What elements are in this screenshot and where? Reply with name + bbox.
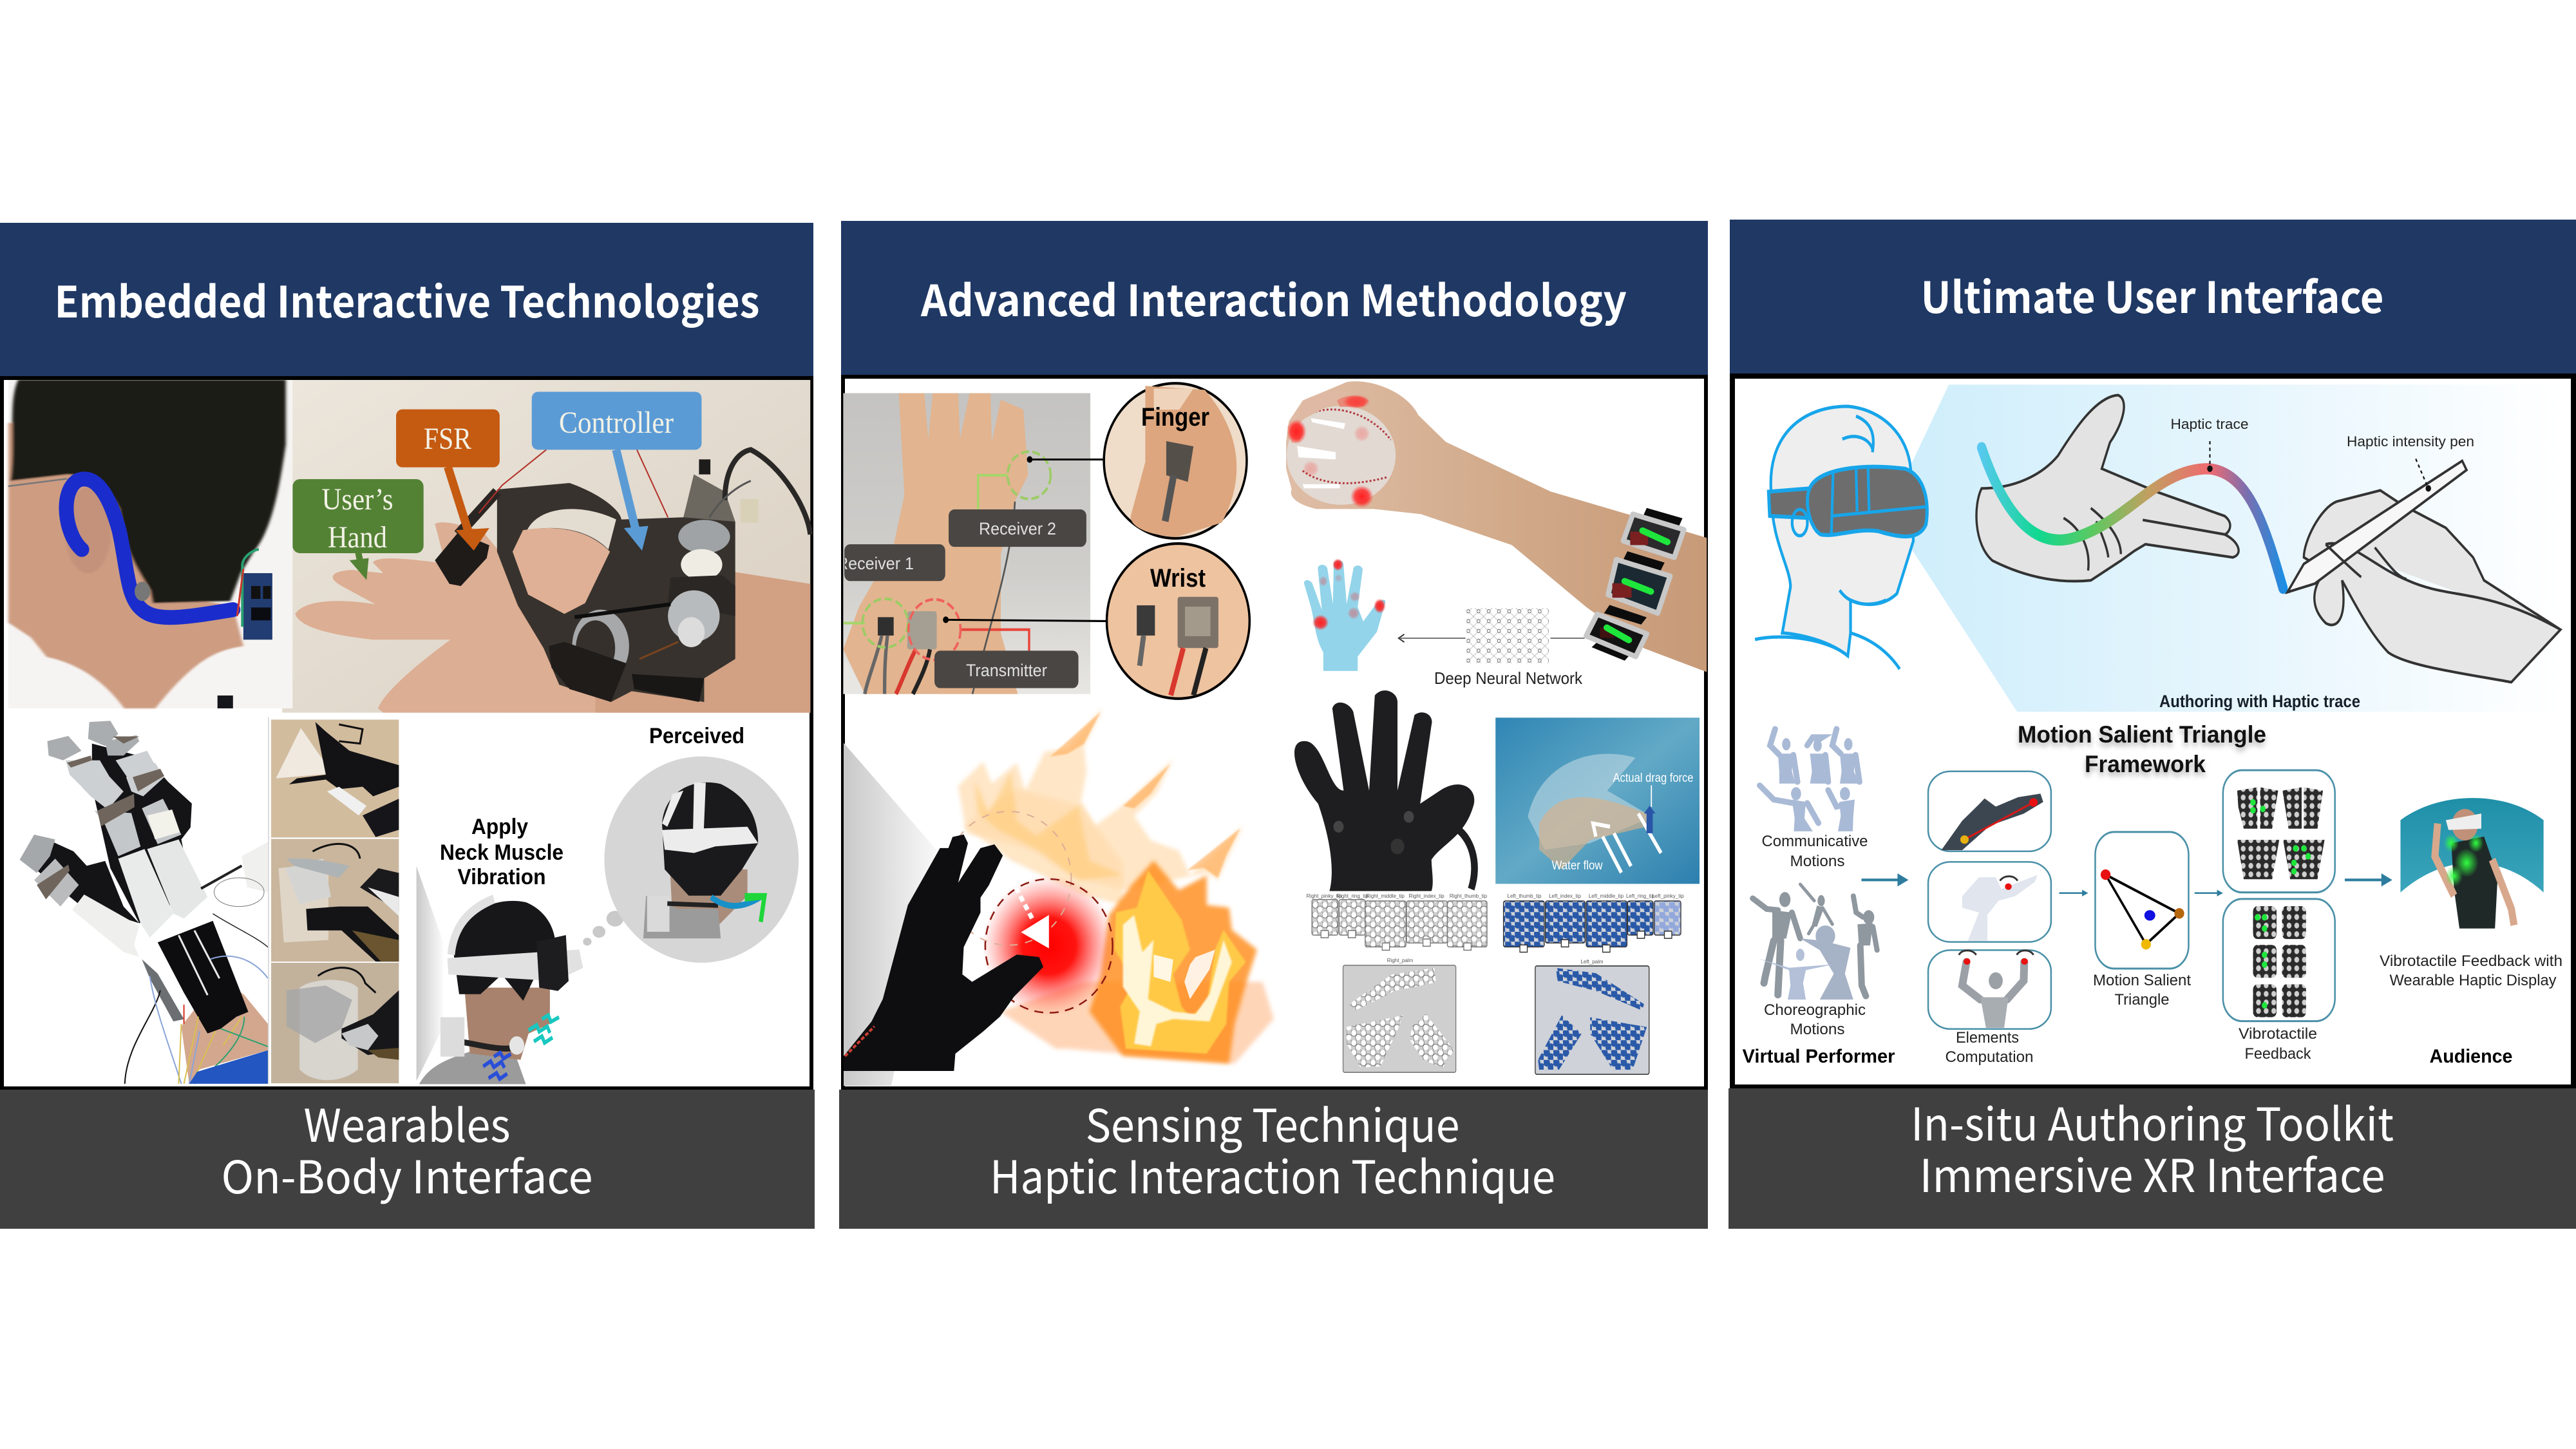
heading bar: Advanced Interaction Methodology: Advanced Interaction Methodology (920, 267, 1627, 329)
label: FSR: FSR (424, 422, 471, 456)
icon: gesturing hand (1976, 395, 2239, 581)
chart: left hand sensor dot maps: Left_palm (1580, 959, 1604, 965)
heading bar: Embedded Interactive Technologies (0, 223, 813, 378)
chart: right hand sensor dot maps: Right_middle_tip (1366, 893, 1405, 899)
caption bar: Sensing Technique, Haptic Interaction Technique: Haptic Interaction Technique (990, 1142, 1555, 1207)
chart: left hand sensor dot maps: Left_pinky_tip (1652, 893, 1684, 899)
figures: communicative motions (1760, 729, 1868, 870)
diagram: motion salient triangle (2093, 832, 2191, 1009)
panel: Advanced Interaction Methodology (837, 221, 1708, 1229)
label: Water flow: Water flow (1552, 859, 1603, 873)
heading bar: Ultimate User Interface: Ultimate User Interface (1920, 263, 2384, 326)
figures: choreographic motions (1753, 884, 1877, 1038)
label: Haptic trace: Haptic trace (2170, 416, 2249, 432)
label: Communicative Motions: Motions (1790, 853, 1844, 870)
panel: Ultimate User Interface (1728, 220, 2576, 1229)
caption bar: In-situ Authoring Toolkit, Immersive XR Interface: Immersive XR Interface (1919, 1141, 2385, 1206)
arrow: controller (616, 450, 649, 551)
label: Transmitter: Transmitter (966, 661, 1047, 680)
photo: wrist and finger sensors with labels (837, 393, 1106, 694)
photo: hand gripping baseball with haptic wristband (1286, 381, 1707, 672)
illustration: audience wearing haptic display (2380, 798, 2562, 1067)
arrow: performer to elements (1861, 873, 1908, 887)
arrow: user's hand (350, 553, 368, 580)
illustration: gloved hand reaching into flame (844, 707, 1274, 1086)
label: Vibrotactile Feedback: Vibrotactile (2239, 1025, 2317, 1043)
label: Receiver 2: Receiver 2 (979, 519, 1056, 538)
label: Virtual Performer: Virtual Performer (1743, 1046, 1895, 1067)
panel: Embedded Interactive Technologies (0, 223, 815, 1229)
label: Elements Computation: Elements (1956, 1029, 2019, 1046)
image: hand in water with drag force (1495, 717, 1700, 884)
label: Apply Neck Muscle Vibration: Apply (471, 815, 528, 839)
inset circle: wrist sensors (1107, 544, 1249, 699)
label: Wrist: Wrist (1150, 564, 1206, 592)
label: Vibrotactile Feedback (2239, 1025, 2317, 1063)
label: Authoring with Haptic trace: Authoring with Haptic trace (2159, 692, 2360, 711)
label: Choreographic Motions: Choreographic (1764, 1001, 1866, 1019)
label: Communicative Motions: Communicative (1762, 833, 1868, 850)
chart line: haptic trace (1982, 448, 2283, 588)
label: Apply Neck Muscle Vibration: Vibration (457, 865, 546, 889)
icon: hand holding haptic pen (2287, 459, 2561, 682)
caption bar: Wearables, On-Body Interface: Wearables (304, 1090, 510, 1155)
photo: blue behind-the-ear device on head (8, 380, 292, 708)
label: Vibrotactile Feedback with Wearable Haptic Display: Wearable Haptic Display (2389, 972, 2557, 989)
label: Deep Neural Network: Deep Neural Network (1434, 668, 1583, 688)
chart: right hand sensor dot maps: Right_ring_tip (1336, 893, 1368, 899)
label: User's Hand: Hand (328, 520, 387, 554)
label: Communicative Motions (1762, 833, 1868, 870)
label: Perceived: Perceived (649, 724, 744, 748)
label: Vibrotactile Feedback with Wearable Haptic Display (2380, 952, 2562, 989)
photo strip: glove grasping three objects (271, 719, 399, 1083)
flow box: elements computation (1928, 772, 2051, 1066)
label: Haptic intensity pen: Haptic intensity pen (2347, 433, 2474, 450)
chart: right hand sensor dot maps: Right_pinky_tip (1307, 893, 1342, 899)
chart: right hand sensor dot maps: Right_thumb_tip (1450, 893, 1488, 899)
label: Motion Salient Triangle: Motion Salient (2093, 972, 2191, 989)
heading: Motion Salient Triangle Framework: Framework (2085, 751, 2206, 777)
label: Motion Salient Triangle (2093, 972, 2191, 1009)
photo: hand with force feedback device and labels (282, 380, 810, 713)
illustration: authoring with haptic trace (1755, 384, 2561, 712)
icon: VR user head outline (1755, 406, 1927, 669)
inset circle: finger sensor (1104, 383, 1247, 538)
heading: Motion Salient Triangle Framework (2018, 721, 2266, 777)
label: Elements Computation: Computation (1945, 1048, 2034, 1066)
label: Elements Computation (1945, 1029, 2034, 1066)
arrow: elements to triangle (2059, 890, 2088, 896)
label: Actual drag force: Actual drag force (1613, 772, 1694, 785)
photo: black haptic glove (1294, 690, 1475, 891)
label: Choreographic Motions (1764, 1001, 1866, 1038)
caption bar: Wearables, On-Body Interface: On-Body Interface (222, 1142, 592, 1207)
label: Vibrotactile Feedback with Wearable Haptic Display: Vibrotactile Feedback with (2380, 952, 2562, 970)
chart: right hand sensor dot maps (1307, 893, 1488, 1072)
caption bar: Sensing Technique, Haptic Interaction Technique: Sensing Technique (1086, 1090, 1459, 1155)
label: Vibrotactile Feedback: Feedback (2245, 1045, 2311, 1063)
label: Motion Salient Triangle: Triangle (2115, 991, 2169, 1009)
caption bar: Wearables, On-Body Interface (0, 1090, 815, 1229)
chart: right hand sensor dot maps: Right_index_tip (1408, 893, 1444, 899)
label: Finger: Finger (1141, 403, 1209, 431)
illustration: light blue hand with pressure points (1304, 558, 1386, 671)
chart: left hand sensor dot maps: Left_thumb_tip (1508, 893, 1542, 899)
label: Audience: Audience (2429, 1046, 2513, 1067)
chart: left hand sensor dot maps: Left_index_tip (1549, 893, 1581, 899)
label: User's Hand: User’s (322, 482, 393, 516)
chart: right hand sensor dot maps: Right_palm (1387, 958, 1414, 963)
label: Receiver 1: Receiver 1 (837, 554, 914, 573)
label: User's Hand (322, 482, 393, 554)
label: Choreographic Motions: Motions (1790, 1021, 1844, 1038)
heading bar: Ultimate User Interface (1730, 220, 2576, 375)
diagram: vibrotactile feedback vests (2223, 770, 2335, 1063)
heading bar: Advanced Interaction Methodology (841, 221, 1708, 377)
chart: left hand sensor dot maps: Left_middle_tip (1589, 893, 1624, 899)
heading bar: Embedded Interactive Technologies: Embedded Interactive Technologies (54, 268, 760, 330)
arrow: feedback to audience (2345, 873, 2392, 887)
label: Controller: Controller (559, 406, 674, 440)
illustration: neck muscle vibration with headset (417, 724, 799, 1084)
label: Apply Neck Muscle Vibration: Neck Muscle (440, 840, 564, 865)
caption bar: Sensing Technique, Haptic Interaction Technique (839, 1090, 1708, 1229)
diagram: deep neural network (1399, 608, 1584, 688)
arrow: FSR (448, 467, 489, 551)
photo: robotic hand exoskeleton glove (20, 717, 269, 1084)
caption bar: In-situ Authoring Toolkit, Immersive XR Interface: In-situ Authoring Toolkit (1911, 1089, 2394, 1154)
chart: left hand sensor dot maps: Left_ring_tip (1626, 893, 1655, 899)
heading: Motion Salient Triangle Framework: Motion Salient Triangle (2018, 721, 2266, 748)
caption bar: In-situ Authoring Toolkit, Immersive XR Interface (1728, 1088, 2576, 1229)
label: Apply Neck Muscle Vibration (440, 815, 564, 889)
chart: left hand sensor dot maps (1504, 893, 1684, 1074)
arrow: triangle to feedback (2195, 890, 2223, 896)
